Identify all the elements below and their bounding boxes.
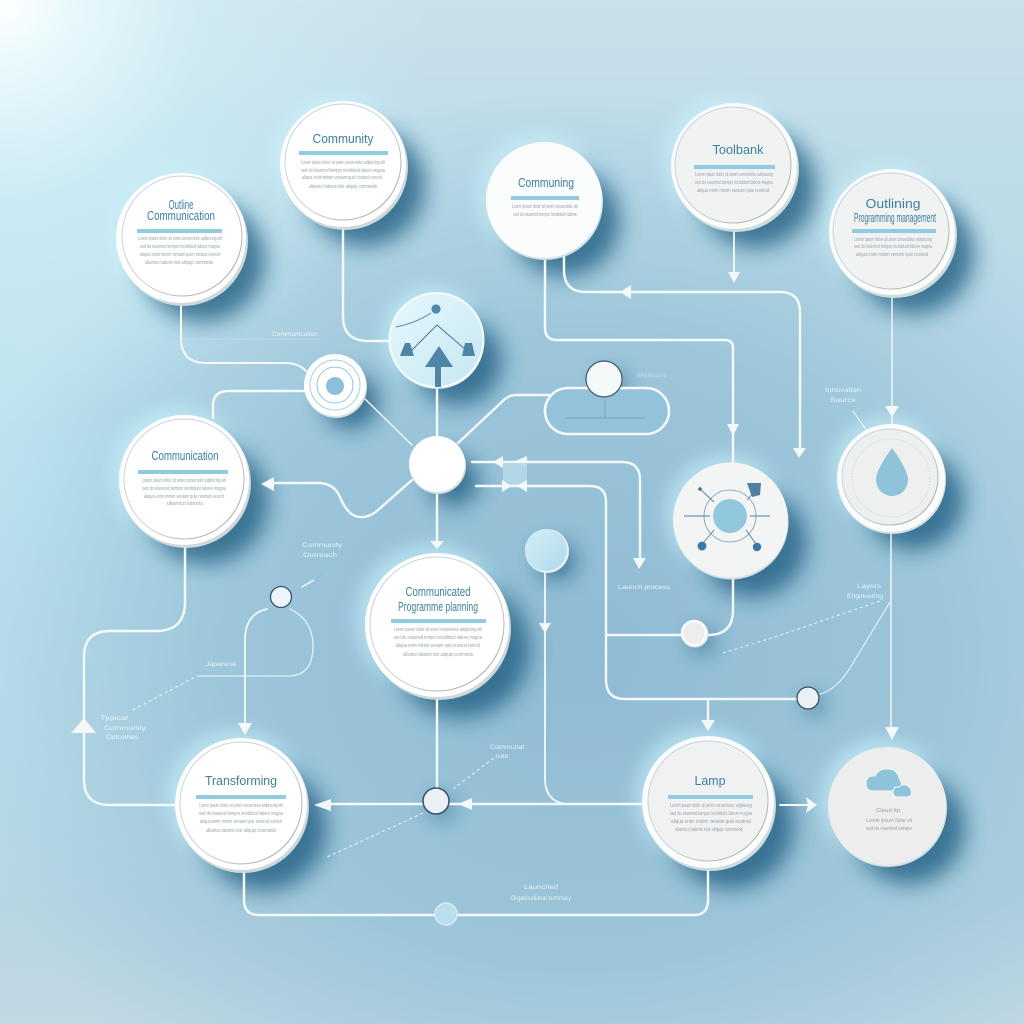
- label: top left: Communication: [272, 331, 318, 338]
- card: transforming: [175, 738, 309, 873]
- node: small loop node: [270, 586, 292, 608]
- title: [147, 197, 215, 223]
- label: lower centre callout: note: [496, 753, 509, 760]
- card: communing: [486, 142, 603, 260]
- body text: Lorem ipsum dolor sit amet consectetur adipiscing elit: [142, 478, 226, 484]
- body text: Cloud tip: [876, 808, 900, 814]
- label: bottom: Launched: [524, 884, 558, 891]
- connector: centre card to junction node: [436, 698, 438, 790]
- card: community: [280, 101, 408, 230]
- title: Community: [312, 131, 374, 146]
- body text: Lorem ipsum dolor sit: [866, 818, 912, 824]
- card: outline: [116, 173, 248, 306]
- connector: second card to arrow icon: [343, 226, 392, 341]
- icon: target node: [304, 354, 367, 418]
- card: outlining: [829, 169, 957, 298]
- body text: aliqua enim minim veniam quis nostrud exercit: [140, 252, 220, 258]
- title: Lamp: [694, 773, 726, 788]
- icon: pale blue node: [525, 529, 569, 573]
- icon: cloud: [866, 769, 912, 797]
- title: Toolbank: [712, 142, 764, 157]
- label: upper left of centre: Community: [302, 542, 343, 549]
- icon: pill node: [586, 361, 622, 397]
- node: bottom line node: [435, 903, 457, 925]
- bar: [694, 165, 775, 169]
- connector: third card across to target disc: [545, 256, 739, 463]
- title: Programme planning: [398, 599, 478, 614]
- title: [854, 196, 936, 225]
- body text: sed do eiusmod tempor incididunt labore magna: [670, 811, 753, 817]
- card: cloud disc: [828, 747, 947, 867]
- label: right callout: [847, 583, 883, 600]
- node: right junction: [797, 687, 819, 709]
- connector: third card to right long arrow: [564, 256, 806, 458]
- arrow: ninth card to junction: [449, 798, 642, 810]
- body text: ullamco laboris nisi aliquip commodo: [403, 652, 473, 658]
- body text: sed do eiusmod tempor: [866, 826, 912, 832]
- bar: [196, 795, 286, 799]
- bar: [299, 151, 388, 155]
- icon: arrow disc: [390, 293, 484, 389]
- title: Communication: [152, 448, 218, 463]
- body text: sed do eiusmod tempor incididunt labore magna: [301, 168, 386, 174]
- arrow: junction to eighth card: [314, 799, 423, 811]
- arrow: hub to centre card: [430, 490, 444, 549]
- title: Communicated: [406, 584, 470, 599]
- body text: [394, 627, 483, 658]
- card: centre programme: [365, 553, 511, 700]
- arrow: line down to ninth card: [701, 699, 715, 731]
- body text: aliqua enim minim veniam quis nostrud: [856, 252, 928, 258]
- label: bottom: [511, 884, 571, 902]
- title: Communication: [147, 208, 215, 223]
- connector: outline card to target node: [181, 303, 306, 371]
- panel: pill shape: [545, 388, 669, 434]
- body text: aliqua enim minim veniam quis nostrud: [697, 188, 769, 194]
- body text: [138, 236, 222, 266]
- arrow: droplet disc to cloud disc: [885, 530, 899, 740]
- body text: sed do eiusmod tempor incididunt labore magna: [695, 180, 774, 186]
- label: right callout: Engineering: [847, 593, 883, 600]
- title: [398, 584, 478, 614]
- title: Transforming: [205, 773, 277, 788]
- body text: sed do eiusmod tempor incididunt labore magna: [140, 244, 221, 250]
- label: droplet callout: [825, 387, 861, 404]
- card: lamp: [642, 736, 776, 871]
- body text: Lorem ipsum dolor sit amet consectetur adipiscing: [854, 237, 932, 243]
- body text: [301, 160, 386, 190]
- label: right callout: Layers: [857, 583, 882, 590]
- connector: hub to target node: [365, 399, 412, 445]
- body text: [199, 803, 284, 834]
- bar: [511, 196, 579, 200]
- body text: aliqua enim minim veniam quis nostrud exercit: [396, 643, 480, 649]
- icon: central hub: [409, 436, 466, 494]
- panel: small square between arrows: [503, 463, 527, 485]
- title: Communing: [518, 175, 574, 190]
- node: lower junction: [423, 788, 449, 814]
- body text: Lorem ipsum dolor sit amet consectetur adipiscing elit: [394, 627, 482, 633]
- card: toolbank: [671, 103, 799, 232]
- connector: target disc to pale node: [607, 578, 733, 635]
- body text: sed do eiusmod tempor incididunt labore magna: [142, 486, 227, 492]
- connector: left card up to target node: [213, 391, 306, 418]
- body text: sed do eiusmod tempor incididunt labore magna: [199, 811, 284, 817]
- body text: Lorem ipsum dolor sit amet consectetur adipiscing elit: [199, 803, 283, 809]
- body text: aliqua enim minim veniam quis nostrud exercit: [302, 175, 382, 181]
- title: Programming management: [854, 210, 936, 225]
- label: bottom: Organisational summary: [511, 895, 571, 902]
- title: Outlining: [866, 196, 920, 211]
- body text: Lorem ipsum dolor sit amet consectetur adipiscing elit: [301, 160, 385, 166]
- connector: small node loop: [198, 609, 313, 735]
- body text: sed do eiusmod tempor incididunt labore magna: [394, 635, 483, 641]
- connector: hub to arrow icon: [436, 388, 438, 437]
- body text: Lorem ipsum dolor sit amet consectetur elit: [512, 204, 578, 210]
- icon: droplet disc: [837, 424, 946, 534]
- connector: left card loop back to eighth card: [71, 544, 185, 805]
- body text: [854, 237, 933, 258]
- connector: bottom return line: [244, 867, 708, 915]
- bar: [852, 229, 936, 233]
- body text: aliqua enim minim veniam quis nostrud exercit: [144, 494, 224, 500]
- body text: aliqua enim minim veniam quis nostrud: [671, 819, 751, 825]
- body text: [670, 803, 753, 833]
- body text: sed do eiusmod tempor incididunt labore: [513, 212, 577, 218]
- arrow: fifth card to droplet disc: [885, 294, 899, 426]
- label: pill side: Measure: [637, 372, 667, 379]
- label: lower centre callout: [490, 744, 524, 760]
- bar: [391, 619, 486, 623]
- bar: [668, 795, 753, 799]
- connector: lower double arrow line: [476, 480, 797, 699]
- body text: ullamco laboris nisi aliquip commodo: [309, 184, 377, 190]
- label: upper left of centre: [302, 542, 343, 559]
- arrow: ninth card to cloud disc: [780, 797, 817, 813]
- body text: [512, 204, 578, 218]
- label: left callout: Community: [104, 725, 147, 732]
- label: loop: Japanese: [206, 661, 236, 668]
- body text: Lorem ipsum dolor sit amet consectetur adipiscing: [695, 172, 773, 178]
- label: below arrow: Launch process: [618, 584, 671, 591]
- label: droplet callout: Innovation: [825, 387, 861, 394]
- bar: [138, 470, 228, 474]
- icon: target disc: [673, 462, 788, 580]
- connector: hub to pill: [458, 395, 568, 443]
- title: Outline: [168, 197, 194, 212]
- connector: upper double arrow line: [472, 456, 646, 569]
- label: droplet callout: Source: [830, 397, 856, 404]
- body text: [866, 808, 912, 832]
- body text: ullamco laboris nisi aliquip commodo: [206, 828, 276, 834]
- body text: ullamco laboris nisi aliquip commodo: [145, 260, 213, 266]
- callout leader lines: [133, 339, 890, 857]
- body text: [142, 478, 227, 507]
- body text: ullamco laboris nisi aliquip commodo: [675, 827, 743, 833]
- label: upper left of centre: Outreach: [303, 552, 337, 559]
- body text: [695, 172, 774, 194]
- body text: Lorem ipsum dolor sit amet consectetur adipiscing elit: [138, 236, 222, 242]
- body text: sed do eiusmod tempor incididunt labore magna: [854, 244, 933, 250]
- label: left callout: [100, 715, 147, 741]
- node: grey junction: [682, 620, 708, 648]
- body text: ullamco laboris: [167, 501, 203, 507]
- bar: [137, 229, 222, 233]
- label: left callout: Outcomes: [106, 734, 139, 741]
- arrow: fourth card down: [728, 229, 740, 283]
- label: lower centre callout: Communal: [490, 744, 524, 751]
- body text: Lorem ipsum dolor sit amet consectetur adipiscing: [670, 803, 752, 809]
- label: left callout: Typical: [100, 715, 129, 722]
- body text: aliqua enim minim veniam quis nostrud exercit: [200, 819, 282, 825]
- arrow: hub to left card: [261, 477, 412, 517]
- card: communication: [119, 415, 251, 548]
- arrow: light node down to ninth card: [539, 573, 642, 804]
